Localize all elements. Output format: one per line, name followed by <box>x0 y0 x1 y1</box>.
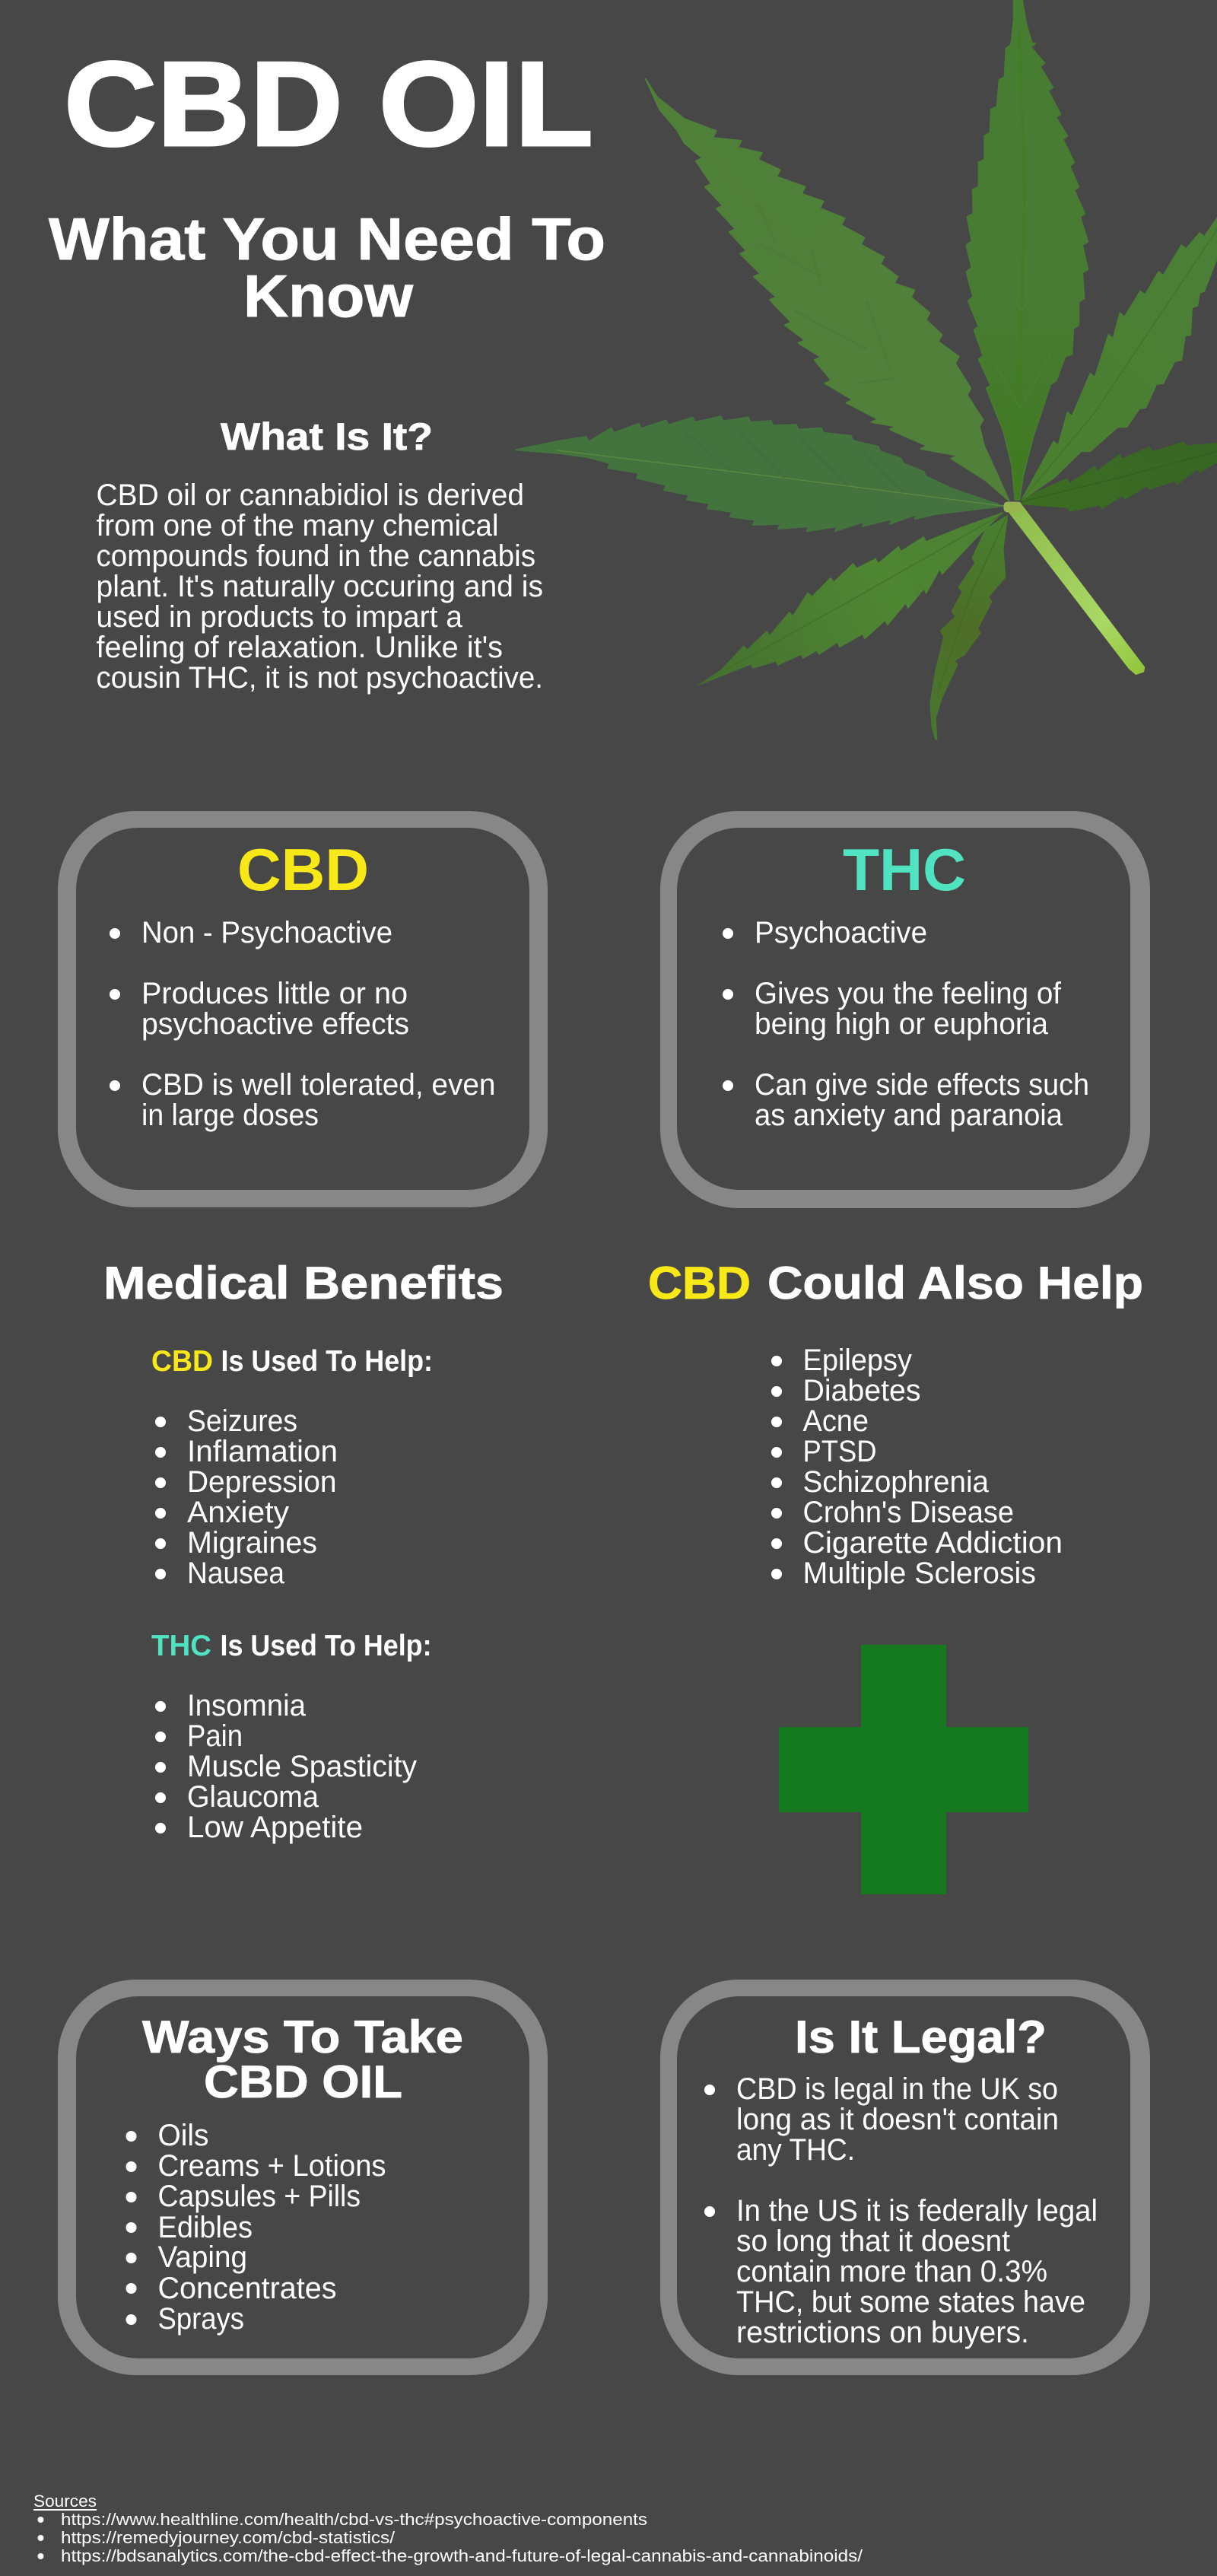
list: THC conditions: Glaucoma <box>187 1780 319 1814</box>
icon: medical cross <box>779 1645 1028 1894</box>
list: other conditions: Cigarette Addiction <box>803 1526 1063 1560</box>
leaflet: lower left <box>696 512 1003 686</box>
list: THC conditions: Low Appetite <box>187 1811 363 1844</box>
list: other conditions: Acne <box>803 1404 869 1438</box>
list: CBD conditions: Depression <box>187 1465 336 1499</box>
panel: THC <box>660 811 1150 1208</box>
text block: what is it: used in products to impart a <box>96 600 463 634</box>
heading: CBD: CBD <box>237 836 369 903</box>
list: ways to take: Edibles <box>158 2211 253 2244</box>
list: other conditions: Diabetes <box>803 1374 920 1407</box>
list: legal status: restrictions on buyers. <box>736 2316 1029 2349</box>
list: other conditions: Schizophrenia <box>803 1465 990 1499</box>
panel: CBD <box>58 811 548 1207</box>
list: CBD properties: Produces little or no <box>141 977 408 1010</box>
title: CBD OIL <box>64 37 593 171</box>
list: THC properties: Gives you the feeling of <box>755 977 1062 1010</box>
subheading: CBD is used to help: Is Used To Help: <box>221 1345 433 1378</box>
list: CBD properties: in large doses <box>141 1099 319 1132</box>
list: ways to take <box>126 2119 386 2336</box>
list: CBD conditions <box>155 1404 338 1590</box>
list: ways to take: Capsules + Pills <box>158 2180 361 2213</box>
sources: https://bdsanalytics.com/the-cbd-effect-the-growth-and-future-of-legal-cannabis-and-cannabinoids/ <box>61 2546 863 2565</box>
heading: is it legal: Is It Legal? <box>795 2012 1047 2062</box>
list: THC conditions: Insomnia <box>187 1689 307 1722</box>
list: CBD conditions: Inflamation <box>187 1435 338 1468</box>
subheading: THC is used to help: THC <box>151 1630 211 1662</box>
sources: https://remedyjourney.com/cbd-statistics/ <box>61 2528 396 2547</box>
subheading: THC is used to help: Is Used To Help: <box>221 1630 432 1662</box>
subheading: CBD is used to help: CBD <box>151 1345 213 1378</box>
text block: what is it: compounds found in the cannabis <box>96 539 535 573</box>
leaflet: bottom <box>929 514 1008 740</box>
list: CBD conditions: Seizures <box>187 1404 297 1438</box>
list: legal status: so long that it doesnt <box>736 2225 1010 2258</box>
sources: Sources <box>33 2492 97 2511</box>
text block: what is it: CBD oil or cannabidiol is derived <box>96 479 524 512</box>
heading: medical benefits: Medical Benefits <box>103 1258 504 1309</box>
list: legal status: In the US it is federally legal <box>736 2194 1098 2228</box>
heading: THC: THC <box>843 836 966 903</box>
list: ways to take: Oils <box>158 2119 208 2152</box>
list: CBD properties: psychoactive effects <box>141 1007 409 1041</box>
heading: what is it: What Is It? <box>221 415 433 458</box>
sources: https://www.healthline.com/health/cbd-vs-thc#psychoactive-components <box>61 2510 647 2529</box>
panel: ways to take <box>58 1980 548 2375</box>
icon: cannabis leaf <box>516 0 1217 740</box>
heading: CBD could also help: Could Also Help <box>767 1258 1143 1309</box>
text block: what is it: feeling of relaxation. Unlike it's <box>96 631 503 664</box>
list: THC properties <box>723 916 1089 1132</box>
list: THC properties: as anxiety and paranoia <box>755 1099 1063 1132</box>
text block: what is it <box>96 479 543 695</box>
subtitle <box>49 205 605 329</box>
list: THC properties: Can give side effects such <box>755 1068 1089 1102</box>
list: legal status: contain more than 0.3% <box>736 2255 1047 2288</box>
list: THC conditions: Pain <box>187 1719 243 1753</box>
subtitle: What You Need To <box>49 205 605 272</box>
leaflet: upper left <box>646 79 1009 501</box>
list: legal status: long as it doesn't contain <box>736 2103 1059 2136</box>
list: other conditions: Epilepsy <box>803 1344 912 1377</box>
sources <box>33 2492 863 2565</box>
list: other conditions: PTSD <box>803 1435 876 1468</box>
list: THC conditions <box>155 1689 417 1844</box>
list: legal status: THC, but some states have <box>736 2285 1085 2319</box>
list: CBD properties: Non - Psychoactive <box>141 916 392 949</box>
leaf stem <box>1003 501 1145 675</box>
text block: what is it: from one of the many chemical <box>96 509 499 542</box>
list: CBD properties <box>110 916 496 1132</box>
leaflet: top <box>966 0 1088 500</box>
list: ways to take: Creams + Lotions <box>158 2149 386 2183</box>
panel: is it legal <box>660 1980 1150 2375</box>
list: CBD conditions: Nausea <box>187 1557 285 1590</box>
leaflet: right <box>1022 441 1217 512</box>
heading: ways to take CBD oil <box>142 2012 463 2107</box>
text block: what is it: plant. It's naturally occuring and is <box>96 570 543 603</box>
leaflet: upper right <box>1022 214 1217 500</box>
list: legal status <box>704 2072 1098 2349</box>
list: CBD properties: CBD is well tolerated, even <box>141 1068 496 1102</box>
heading: ways to take CBD oil: CBD OIL <box>204 2056 402 2107</box>
list: other conditions <box>771 1344 1063 1590</box>
list: CBD conditions: Migraines <box>187 1526 317 1560</box>
heading: ways to take CBD oil: Ways To Take <box>142 2012 463 2062</box>
list: ways to take: Sprays <box>158 2302 244 2336</box>
list: CBD conditions: Anxiety <box>187 1496 289 1529</box>
list: ways to take: Concentrates <box>158 2272 336 2305</box>
heading: CBD could also help: CBD <box>648 1258 751 1309</box>
list: legal status: any THC. <box>736 2133 855 2167</box>
subtitle: Know <box>243 262 413 329</box>
leaflet: left <box>516 416 1003 531</box>
list: other conditions: Crohn's Disease <box>803 1496 1014 1529</box>
list: other conditions: Multiple Sclerosis <box>803 1557 1036 1590</box>
list: THC properties: Psychoactive <box>755 916 927 949</box>
text block: what is it: cousin THC, it is not psychoactive. <box>96 661 543 695</box>
list: ways to take: Vaping <box>158 2240 247 2274</box>
list: THC conditions: Muscle Spasticity <box>187 1750 417 1783</box>
list: legal status: CBD is legal in the UK so <box>736 2072 1058 2106</box>
list: THC properties: being high or euphoria <box>755 1007 1049 1041</box>
